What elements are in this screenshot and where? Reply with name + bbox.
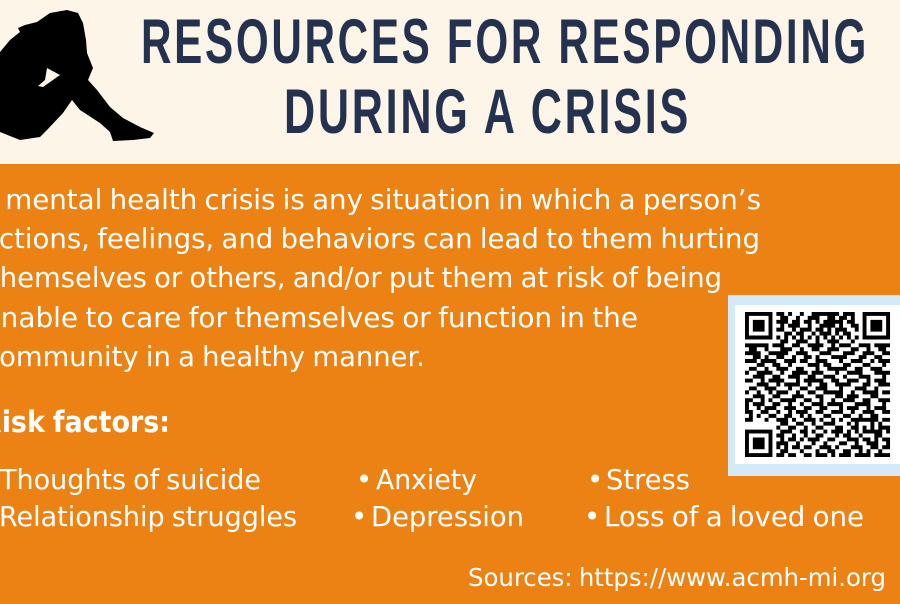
header band — [0, 0, 900, 164]
orange content panel — [0, 164, 900, 604]
risk factor list: Loss of a loved one — [604, 501, 864, 533]
definition text block — [0, 184, 761, 373]
risk factor list: Relationship struggles — [0, 501, 297, 533]
icon: seated figure silhouette — [0, 10, 154, 141]
risk factor list: Anxiety — [376, 464, 477, 496]
definition text block: unable to care for themselves or function in the — [0, 302, 638, 334]
risk factor list: • — [584, 501, 600, 533]
risk factor list: • — [587, 464, 603, 496]
definition text block: A mental health crisis is any situation in which a person’s — [0, 184, 761, 216]
risk factor list: • — [356, 464, 372, 496]
definition text block: actions, feelings, and behaviors can lead to them hurting — [0, 223, 760, 255]
icon: QR code — [745, 314, 890, 455]
sources line: Sources: https://www.acmh-mi.org — [468, 563, 886, 592]
QR code panel — [728, 295, 900, 476]
risk factor list — [0, 464, 864, 533]
title: DURING A CRISIS — [284, 77, 691, 147]
risk factor list: • — [351, 501, 367, 533]
risk factor list: Thoughts of suicide — [0, 464, 261, 496]
definition text block: themselves or others, and/or put them at risk of being — [0, 262, 722, 294]
title — [141, 7, 869, 147]
risk factor list: Depression — [371, 501, 524, 533]
risk factor list: Stress — [606, 464, 690, 496]
